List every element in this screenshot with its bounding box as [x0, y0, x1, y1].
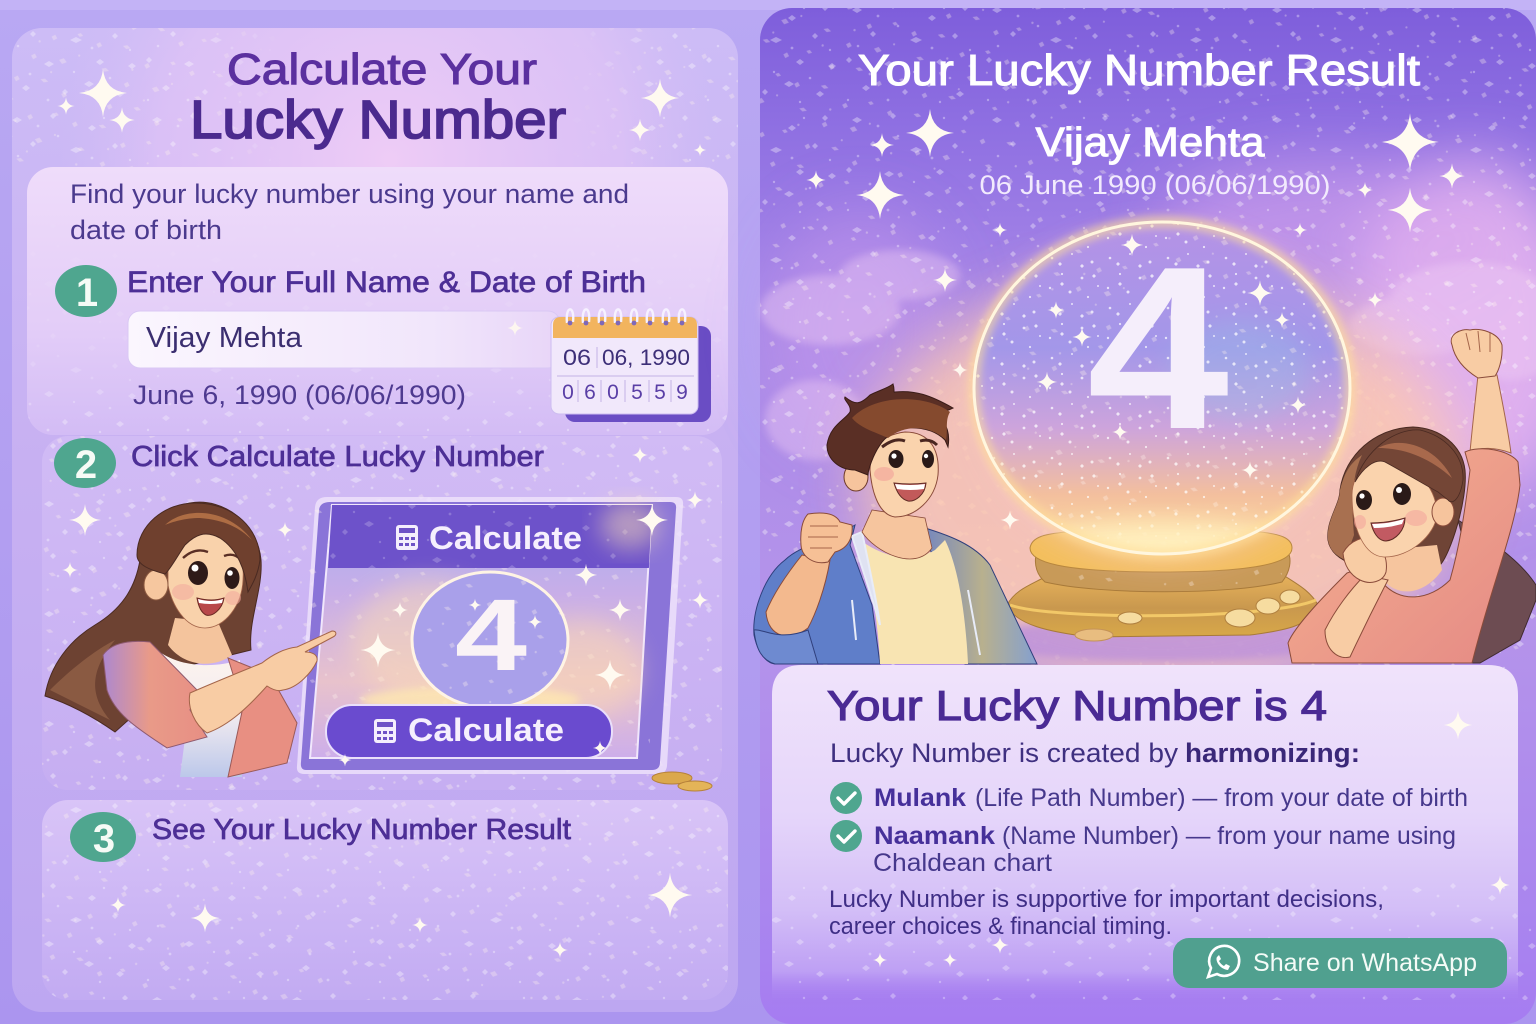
supporting note: career choices & financial timing. — [829, 913, 1172, 940]
eyes — [188, 561, 208, 585]
card subheading: harmonizing: — [1185, 738, 1360, 768]
supporting note — [829, 886, 1384, 940]
list item: naamank — [830, 820, 1456, 877]
list item: mulank: Mulank — [874, 784, 966, 812]
neck — [862, 510, 932, 559]
illustration: girl pointing — [45, 502, 336, 777]
top — [1288, 449, 1520, 663]
eyes — [1356, 490, 1372, 510]
result circle: 4 — [455, 578, 527, 692]
title: Calculate Your — [227, 45, 537, 94]
icon: calendar: 5 — [631, 381, 643, 404]
hoodie — [754, 525, 880, 664]
intro text: Find your lucky number using your name and — [70, 179, 629, 209]
date text: June 6, 1990 (06/06/1990) — [133, 380, 466, 410]
card: lucky number explanation — [772, 665, 1536, 1005]
intro text: date of birth — [70, 215, 222, 245]
sparkles: card — [873, 711, 1510, 967]
shirt — [860, 540, 968, 664]
neck — [1380, 545, 1442, 591]
icon: calendar: 9 — [676, 381, 688, 404]
list item: mulank: (Life Path Number) — from your date of birth — [975, 784, 1468, 812]
sparkles: result background — [806, 109, 1465, 378]
date: 06 June 1990 (06/06/1990) — [980, 170, 1330, 200]
calculate button: Calculate — [408, 712, 564, 748]
step 3 badge: 3 — [93, 817, 115, 861]
fist — [1451, 330, 1502, 378]
face — [1352, 459, 1437, 557]
sparkles — [110, 873, 692, 958]
icon: whatsapp — [1208, 946, 1239, 977]
step 1 badge: 1 — [76, 271, 98, 315]
list item: mulank — [830, 782, 1468, 814]
step 2 badge — [54, 438, 116, 488]
header label: Calculate — [429, 520, 582, 556]
name: Vijay Mehta — [1036, 119, 1265, 165]
fringe — [1355, 430, 1463, 502]
supporting note: Lucky Number is supportive for important decisions, — [829, 886, 1384, 913]
step 3 heading: See Your Lucky Number Result — [152, 814, 571, 846]
result title: Your Lucky Number Result — [858, 46, 1420, 95]
eyes — [888, 450, 904, 468]
hood lining and strings — [852, 532, 980, 655]
icon: calendar: 0 — [562, 381, 574, 404]
number 4: 4 — [1087, 219, 1229, 478]
arm and fist — [766, 555, 830, 636]
mouth — [1371, 518, 1405, 541]
sparkles — [339, 504, 668, 766]
neck — [168, 618, 232, 664]
result circle — [412, 572, 568, 708]
calculator window — [297, 497, 683, 774]
list item: naamank: Naamank — [874, 822, 995, 850]
step 2 heading: Click Calculate Lucky Number — [131, 441, 544, 473]
raised arm — [1470, 375, 1511, 453]
name input — [128, 311, 560, 368]
icon: calendar: 6 — [584, 381, 596, 404]
mouth — [197, 598, 224, 615]
step 1 heading: Enter Your Full Name & Date of Birth — [127, 266, 646, 299]
mouth — [894, 483, 926, 501]
back hair — [1328, 427, 1465, 565]
step 1 badge — [55, 265, 117, 317]
title: Lucky Number — [190, 90, 566, 150]
face — [870, 432, 938, 517]
clouds — [760, 250, 1536, 460]
whatsapp button — [1173, 938, 1507, 988]
step 2 badge: 2 — [75, 443, 97, 487]
panel: your lucky number result — [754, 8, 1536, 1024]
cardigan — [228, 658, 297, 777]
card subheading: Lucky Number is created by — [830, 738, 1179, 768]
arm — [189, 631, 336, 733]
list item: naamank: Chaldean chart — [873, 849, 1052, 877]
illustration: girl cheering — [1288, 330, 1536, 663]
sparkles: title area — [57, 69, 706, 156]
hair — [827, 384, 953, 475]
icon: calendar: 06 — [563, 345, 591, 370]
illustration: boy cheering — [754, 384, 1037, 664]
icon: calendar: 06, 1990 — [602, 345, 690, 370]
card: step 1 enter name and date — [27, 167, 728, 435]
crystal ball — [958, 214, 1366, 587]
hair back — [45, 502, 261, 732]
whatsapp button: Share on WhatsApp — [1253, 949, 1477, 977]
name input: Vijay Mehta — [146, 322, 303, 354]
card: step 3 see result — [42, 800, 728, 1000]
icon: calendar: 5 — [654, 381, 666, 404]
shirt — [157, 650, 242, 777]
icon: calendar — [551, 309, 711, 422]
list item: naamank: (Name Number) — from your name using — [1002, 822, 1456, 850]
title — [190, 45, 566, 150]
card subheading — [830, 738, 1360, 768]
glow cluster — [350, 501, 660, 720]
icon: coins — [652, 772, 712, 791]
orb glow background — [862, 280, 1462, 680]
crystal ball base — [977, 532, 1347, 662]
hair top — [137, 503, 260, 592]
pink haze — [770, 160, 1536, 500]
sparkles: step 2 background — [62, 447, 709, 609]
face — [168, 530, 243, 628]
step 3 badge — [70, 812, 136, 862]
forearm and hand — [1325, 575, 1388, 658]
card: step 2 click calculate — [42, 436, 722, 791]
calculate button — [326, 705, 612, 758]
card heading: Your Lucky Number is 4 — [827, 682, 1327, 729]
long hair — [1458, 520, 1536, 663]
icon: calendar: 0 — [607, 381, 619, 404]
intro text — [70, 179, 629, 245]
orb sparkles — [1000, 234, 1307, 530]
